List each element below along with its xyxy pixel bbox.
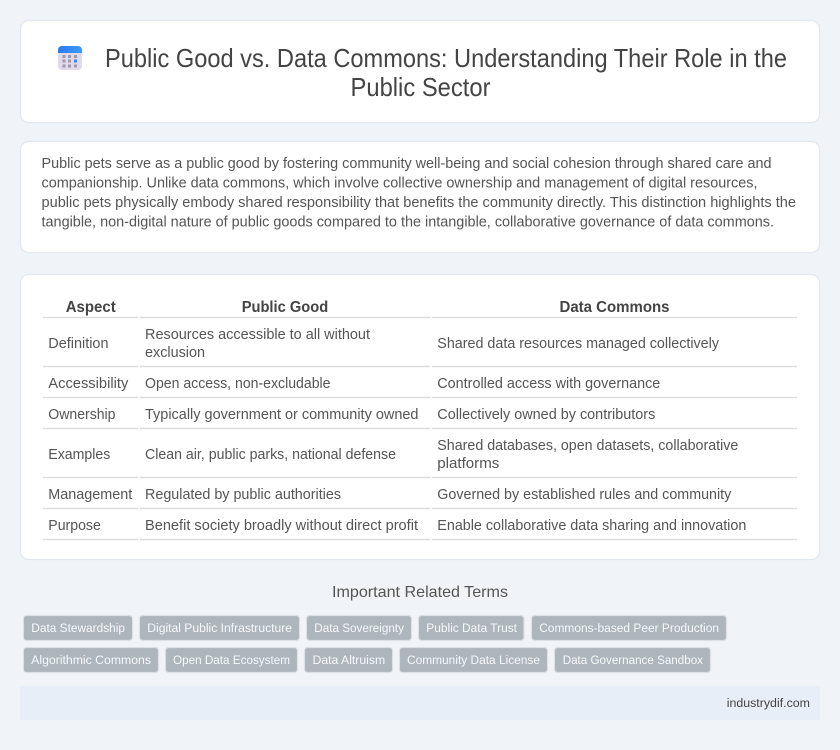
row: examples: Examples — [48, 447, 110, 463]
table header: Public Good — [242, 299, 328, 316]
row: ownership: Typically government or community owned — [145, 407, 418, 423]
row: accessibility — [48, 376, 660, 392]
tag: Digital Public Infrastructure: Digital Public Infrastructure — [147, 621, 292, 635]
tag: Public Data Trust: Public Data Trust — [426, 621, 518, 635]
tag: Public Data Trust — [418, 616, 524, 640]
intro paragraph: public pets physically embody shared responsibility that benefits the community directly. This distinction highlights the — [42, 195, 796, 211]
tag: Data Governance Sandbox: Data Governance Sandbox — [563, 653, 703, 667]
tag: Data Sovereignty — [306, 616, 412, 640]
row: ownership: Ownership — [48, 407, 115, 423]
tag: Data Altruism: Data Altruism — [312, 653, 385, 667]
row: examples: Clean air, public parks, national defense — [145, 447, 396, 463]
row: definition: Definition — [48, 336, 108, 352]
tag: Open Data Ecosystem: Open Data Ecosystem — [173, 653, 290, 667]
row: examples: Shared databases, open datasets, collaborative — [437, 438, 738, 454]
intro paragraph: companionship. Unlike data commons, which involve collective ownership and management of digital resources, — [42, 176, 758, 192]
panel: related term tags — [24, 616, 726, 672]
row: management: Governed by established rules and community — [437, 487, 732, 503]
panel: title card — [20, 20, 820, 122]
title — [105, 45, 787, 102]
footer bar — [20, 686, 820, 720]
panel: intro card — [20, 142, 820, 252]
row: purpose: Enable collaborative data sharing and innovation — [437, 518, 746, 534]
icon: calendar — [58, 46, 82, 70]
row: examples: platforms — [437, 456, 499, 472]
intro paragraph — [42, 156, 796, 230]
row: accessibility: Controlled access with governance — [437, 376, 660, 392]
tag: Algorithmic Commons: Algorithmic Commons — [31, 653, 151, 667]
tag: Commons-based Peer Production — [532, 616, 726, 640]
tag: Community Data License: Community Data License — [407, 653, 540, 667]
row: purpose: Purpose — [48, 518, 101, 534]
tag: Data Governance Sandbox — [554, 648, 710, 672]
row: purpose: Benefit society broadly without direct profit — [145, 518, 418, 534]
table header: Aspect — [66, 299, 116, 316]
row: definition: Resources accessible to all without — [145, 327, 370, 343]
tag: Open Data Ecosystem — [166, 648, 298, 672]
intro paragraph: Public pets serve as a public good by fostering community well-being and social cohesion through shared care and — [42, 156, 772, 172]
row: definition — [48, 327, 720, 361]
tag: Data Stewardship — [24, 616, 132, 640]
heading: important related terms: Important Related Terms — [332, 584, 508, 601]
panel: comparison table — [20, 274, 820, 560]
table header: Data Commons — [560, 299, 670, 316]
row: purpose — [48, 518, 746, 534]
tag: Community Data License — [400, 648, 548, 672]
row: management: Regulated by public authorities — [145, 487, 341, 503]
tag: Data Altruism — [304, 648, 392, 672]
tag: Commons-based Peer Production: Commons-based Peer Production — [539, 621, 719, 635]
title: Public Sector — [350, 74, 491, 102]
title: Public Good vs. Data Commons: Understanding Their Role in the — [105, 45, 787, 73]
row: accessibility: Accessibility — [48, 376, 129, 392]
row: definition: exclusion — [145, 345, 205, 361]
row: management: Management — [48, 487, 132, 503]
row: definition: Shared data resources managed collectively — [437, 336, 720, 352]
row: ownership: Collectively owned by contributors — [437, 407, 655, 423]
row: management — [48, 487, 732, 503]
footer source: industrydif.com — [727, 696, 810, 710]
row: ownership — [48, 407, 655, 423]
tag: Data Sovereignty: Data Sovereignty — [314, 621, 405, 635]
table header — [66, 299, 670, 316]
row: accessibility: Open access, non-excludable — [145, 376, 330, 392]
intro paragraph: tangible, non-digital nature of public goods compared to the intangible, collaborative governance of data commons. — [42, 214, 774, 230]
row: examples — [48, 438, 738, 472]
tag: Algorithmic Commons — [24, 648, 158, 672]
tag: Digital Public Infrastructure — [140, 616, 300, 640]
tag: Data Stewardship: Data Stewardship — [31, 621, 125, 635]
